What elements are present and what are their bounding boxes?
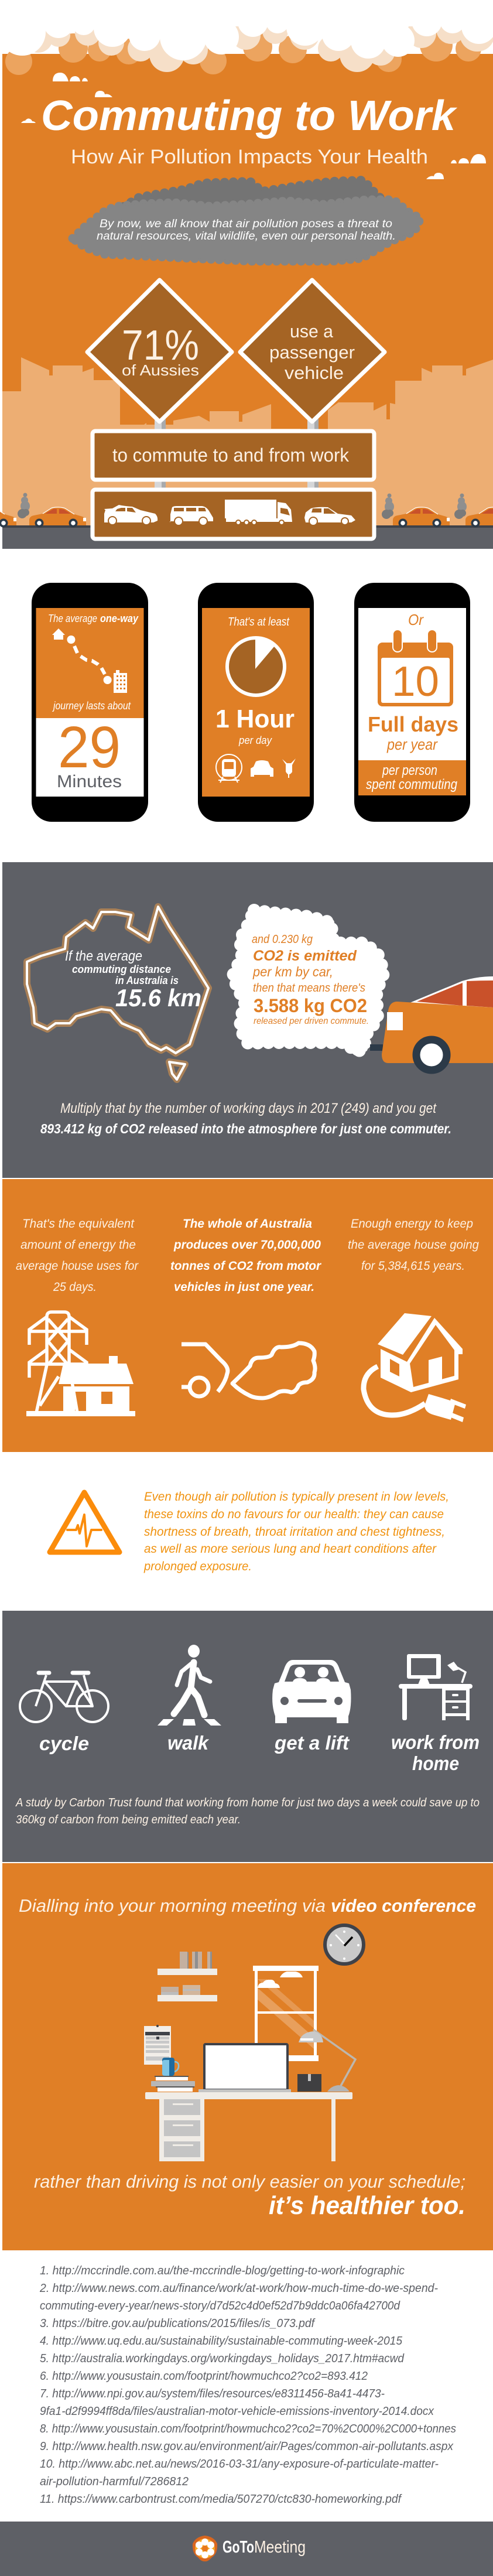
label: walk: walk — [167, 1732, 210, 1754]
phone 1: 29 minutes: one-way — [100, 613, 139, 624]
heading: video conference — [19, 1895, 476, 1916]
panel: sources: air-pollution-harmful/7286812 — [40, 2475, 189, 2488]
phone 1: 29 minutes: 29 — [58, 715, 121, 780]
icon: warning triangle with heartbeat — [50, 1492, 119, 1552]
text: enough energy: the average house going — [348, 1238, 479, 1252]
road sign: use a passenger vehicle: passenger — [269, 342, 355, 363]
logo wordmark: Meeting — [254, 2538, 306, 2557]
panel: alternatives — [2, 1611, 493, 1862]
icon: car front view — [272, 1660, 351, 1723]
phone 2: 1 hour: 1 Hour — [215, 705, 295, 733]
icon: house with plug — [364, 1313, 466, 1422]
icon: truck — [225, 500, 292, 522]
panel: sources: 8. http://www.yousustain.com/footprint/howmuchco2?co2=70%2C000%2C000+tonnes — [40, 2423, 456, 2435]
illustration: wall shelves — [158, 1952, 217, 2001]
road sign: 71% of Aussies — [87, 280, 232, 422]
panel: sources — [39, 2264, 456, 2506]
icon: bicycle — [20, 1673, 108, 1722]
road sign: use a passenger vehicle — [240, 280, 385, 422]
icon: van — [170, 506, 213, 522]
phone 3: 10 full days — [354, 583, 470, 822]
traffic and exhaust — [0, 493, 493, 527]
panel: sources: commuting-every-year/news-story/d7d52c4d0ef52d7b9ddc0a06fa42700d — [40, 2300, 400, 2312]
icon: car exhaust cloud — [182, 1343, 315, 1398]
icon: pylon and house — [26, 1312, 135, 1416]
text: whole of Australia: produces over 70,000,000 — [173, 1238, 321, 1252]
text: health warning — [143, 1490, 449, 1573]
illustration: desk — [145, 2092, 352, 2161]
text: commuting distance: commuting distance — [72, 964, 171, 975]
text: health warning: prolonged exposure. — [143, 1560, 252, 1573]
phone 3: 10 full days: per year — [386, 736, 438, 753]
text: health warning: shortness of breath, throat irritation and chest tightness, — [144, 1525, 445, 1539]
illustration: desk lamp — [299, 2030, 355, 2092]
panel: sources: 4. http://www.uq.edu.au/sustainability/sustainable-commuting-week-2015 — [40, 2335, 403, 2348]
text: equivalent energy: amount of energy the — [20, 1238, 136, 1252]
phone 3: 10 full days: per person — [382, 763, 437, 778]
panel: sources: 6. http://www.yousustain.com/footprint/howmuchco2?co2=893.412 — [40, 2370, 368, 2383]
panel: sources: 9fa1-d2f9994ff8da/files/australian-motor-vehicle-emissions-inventory-2014.docx — [40, 2405, 434, 2418]
icon: sedan — [104, 505, 158, 522]
text: equivalent energy: 25 days. — [53, 1280, 97, 1294]
phone 2: 1 hour: That's at least — [228, 616, 290, 628]
panel: sources: 1. http://mccrindle.com.au/the-mccrindle-blog/getting-to-work-infographic — [40, 2264, 405, 2277]
text: health warning: Even though air pollution is typically present in low levels, — [144, 1490, 449, 1504]
map: Australia outline — [27, 907, 208, 1079]
text: whole of Australia: vehicles in just one year. — [174, 1280, 314, 1294]
smog cloud with intro text — [73, 180, 420, 261]
text: enough energy: for 5,384,615 years. — [361, 1259, 465, 1273]
vehicle wheels — [108, 517, 348, 525]
panel: health warning — [50, 1490, 449, 1573]
exhaust cloud with CO2 text — [232, 910, 384, 1052]
icon: route from home to office — [52, 628, 127, 693]
exhaust cloud with CO2 text: CO2 is emitted — [253, 948, 357, 964]
closing text: rather than driving is not only easier on your schedule; — [34, 2171, 465, 2192]
sign poles — [155, 419, 319, 492]
panel: sources: 3. https://bitre.gov.au/publications/2015/files/is_073.pdf — [40, 2317, 316, 2330]
smog cloud with intro text: By now, we all know that air pollution poses a threat to — [100, 218, 392, 230]
road sign: use a passenger vehicle: use a — [290, 321, 334, 341]
text: equivalent energy — [16, 1217, 139, 1294]
panel: sources: 9. http://www.health.nsw.gov.au/environment/air/Pages/common-air-pollutants.aspx — [40, 2440, 454, 2453]
text: whole of Australia — [170, 1217, 322, 1294]
panel: sources: 2. http://www.news.com.au/finance/work/at-work/how-much-time-do-we-spend- — [39, 2282, 438, 2295]
text: commuting distance: 15.6 km — [115, 984, 201, 1012]
exhaust cloud with CO2 text: 3.588 kg CO2 — [254, 995, 367, 1016]
text: whole of Australia: tonnes of CO2 from motor — [170, 1259, 322, 1273]
panel: sources: 10. http://www.abc.net.au/news/2016-03-31/any-exposure-of-particulate-matter- — [40, 2458, 439, 2471]
road sign: vehicles — [93, 490, 374, 539]
illustration: dark box — [297, 2074, 321, 2092]
exhaust cloud with CO2 text: then that means there's — [253, 982, 365, 995]
phone 2: 1 hour — [198, 583, 314, 822]
road sign: to commute — [93, 431, 374, 480]
smog clouds band — [0, 0, 493, 76]
panel: sources: 7. http://www.npi.gov.au/system/files/resources/e8311456-8a41-4473- — [40, 2387, 385, 2400]
logo wordmark: GoTo — [222, 2538, 254, 2557]
closing text — [34, 2171, 465, 2220]
text: commuting distance: in Australia is — [115, 975, 179, 986]
panel: sources: 5. http://australia.workingdays.org/workingdays_holidays_2017.htm#acwd — [40, 2352, 405, 2365]
illustration: window — [253, 1966, 319, 2061]
label: work from home — [391, 1731, 480, 1774]
illustration: wall calendar — [144, 2025, 171, 2065]
heading: video conference: video conference — [331, 1895, 476, 1916]
icon: scooter — [282, 759, 296, 778]
small white clouds — [21, 73, 486, 179]
phone 3: 10 full days: Full days — [368, 712, 458, 736]
icon: calendar — [378, 629, 453, 706]
logo: GoToMeeting flower — [193, 2536, 217, 2561]
pie chart: one hour — [227, 638, 285, 695]
icon: hatchback — [304, 507, 355, 522]
panel: hero — [0, 0, 493, 549]
text: equivalent energy: average house uses for — [16, 1259, 139, 1273]
text: multiply: Multiply that by the number of working days in 2017 (249) and you get — [60, 1101, 437, 1116]
text: annual CO2 per commuter: 893.412 kg of CO2 released into the atmosphere for just one commuter. — [40, 1121, 451, 1136]
text: enough energy: Enough energy to keep — [351, 1217, 473, 1231]
phone 1: 29 minutes: Minutes — [57, 772, 122, 791]
text: commuting distance — [65, 948, 201, 1012]
text: whole of Australia: The whole of Australia — [183, 1217, 312, 1231]
phone 1: 29 minutes — [32, 583, 148, 822]
subtitle: How Air Pollution Impacts Your Health — [71, 146, 428, 168]
icon: train — [216, 754, 242, 783]
exhaust cloud with CO2 text: released per driven commute. — [254, 1016, 369, 1026]
logo wordmark — [222, 2538, 306, 2557]
exhaust cloud with CO2 text: per km by car, — [252, 964, 333, 979]
panel: sources: 11. https://www.carbontrust.com/media/507270/ctc830-homeworking.pdf — [40, 2493, 402, 2506]
phone 3: 10 full days: Or — [408, 611, 424, 628]
text: Carbon Trust study: 360kg of carbon from being emitted each year. — [16, 1813, 241, 1826]
road sign: 71% of Aussies: 71% — [122, 322, 199, 369]
panel: energy equivalents — [2, 1179, 493, 1452]
text: health warning: as well as more serious lung and heart conditions after — [144, 1542, 437, 1556]
road — [2, 525, 493, 549]
smog cloud with intro text: natural resources, vital wildlife, even our personal health. — [97, 230, 396, 242]
road sign: use a passenger vehicle: vehicle — [285, 363, 344, 383]
phone 3: 10 full days: spent commuting — [366, 777, 458, 792]
icon: calendar: 10 — [392, 658, 439, 705]
label: get a lift: get a lift — [274, 1732, 350, 1754]
heading: video conference: Dialling into your morning meeting via — [19, 1895, 326, 1916]
city skyline — [2, 357, 493, 527]
footer — [0, 2522, 493, 2576]
road sign: to commute: to commute to and from work — [112, 445, 350, 466]
icon: home office desk — [399, 1654, 473, 1720]
text: commuting distance: If the average — [65, 948, 142, 964]
phone 2: 1 hour: per day — [238, 734, 272, 746]
label: cycle: cycle — [39, 1733, 89, 1754]
title: Commuting to Work — [41, 93, 458, 139]
illustration: car rear — [370, 976, 493, 1070]
panel: CO2 emissions — [2, 862, 493, 1178]
text: Carbon Trust study — [15, 1796, 480, 1826]
text: health warning: these toxins do no favours for our health: they can cause — [144, 1508, 444, 1521]
exhaust cloud with CO2 text: and 0.230 kg — [252, 933, 313, 946]
road sign: 71% of Aussies: of Aussies — [122, 361, 199, 379]
icon: car — [251, 760, 273, 777]
closing text: it’s healthier too. — [269, 2191, 465, 2220]
illustration: laptop — [198, 2044, 291, 2092]
label: work from home: work from — [391, 1731, 480, 1753]
illustration: mug on books — [151, 2058, 195, 2092]
phone 1: 29 minutes: journey lasts about — [52, 700, 131, 712]
text: equivalent energy: That's the equivalent — [22, 1217, 135, 1231]
phone 1: 29 minutes: The average — [48, 613, 97, 624]
illustration: clock — [325, 1925, 364, 1964]
icon: walking pedestrian — [158, 1645, 221, 1726]
label: work from home: home — [412, 1752, 459, 1774]
panel: video conference — [2, 1863, 493, 2250]
panel: phones — [32, 583, 470, 822]
text: enough energy — [348, 1217, 479, 1273]
